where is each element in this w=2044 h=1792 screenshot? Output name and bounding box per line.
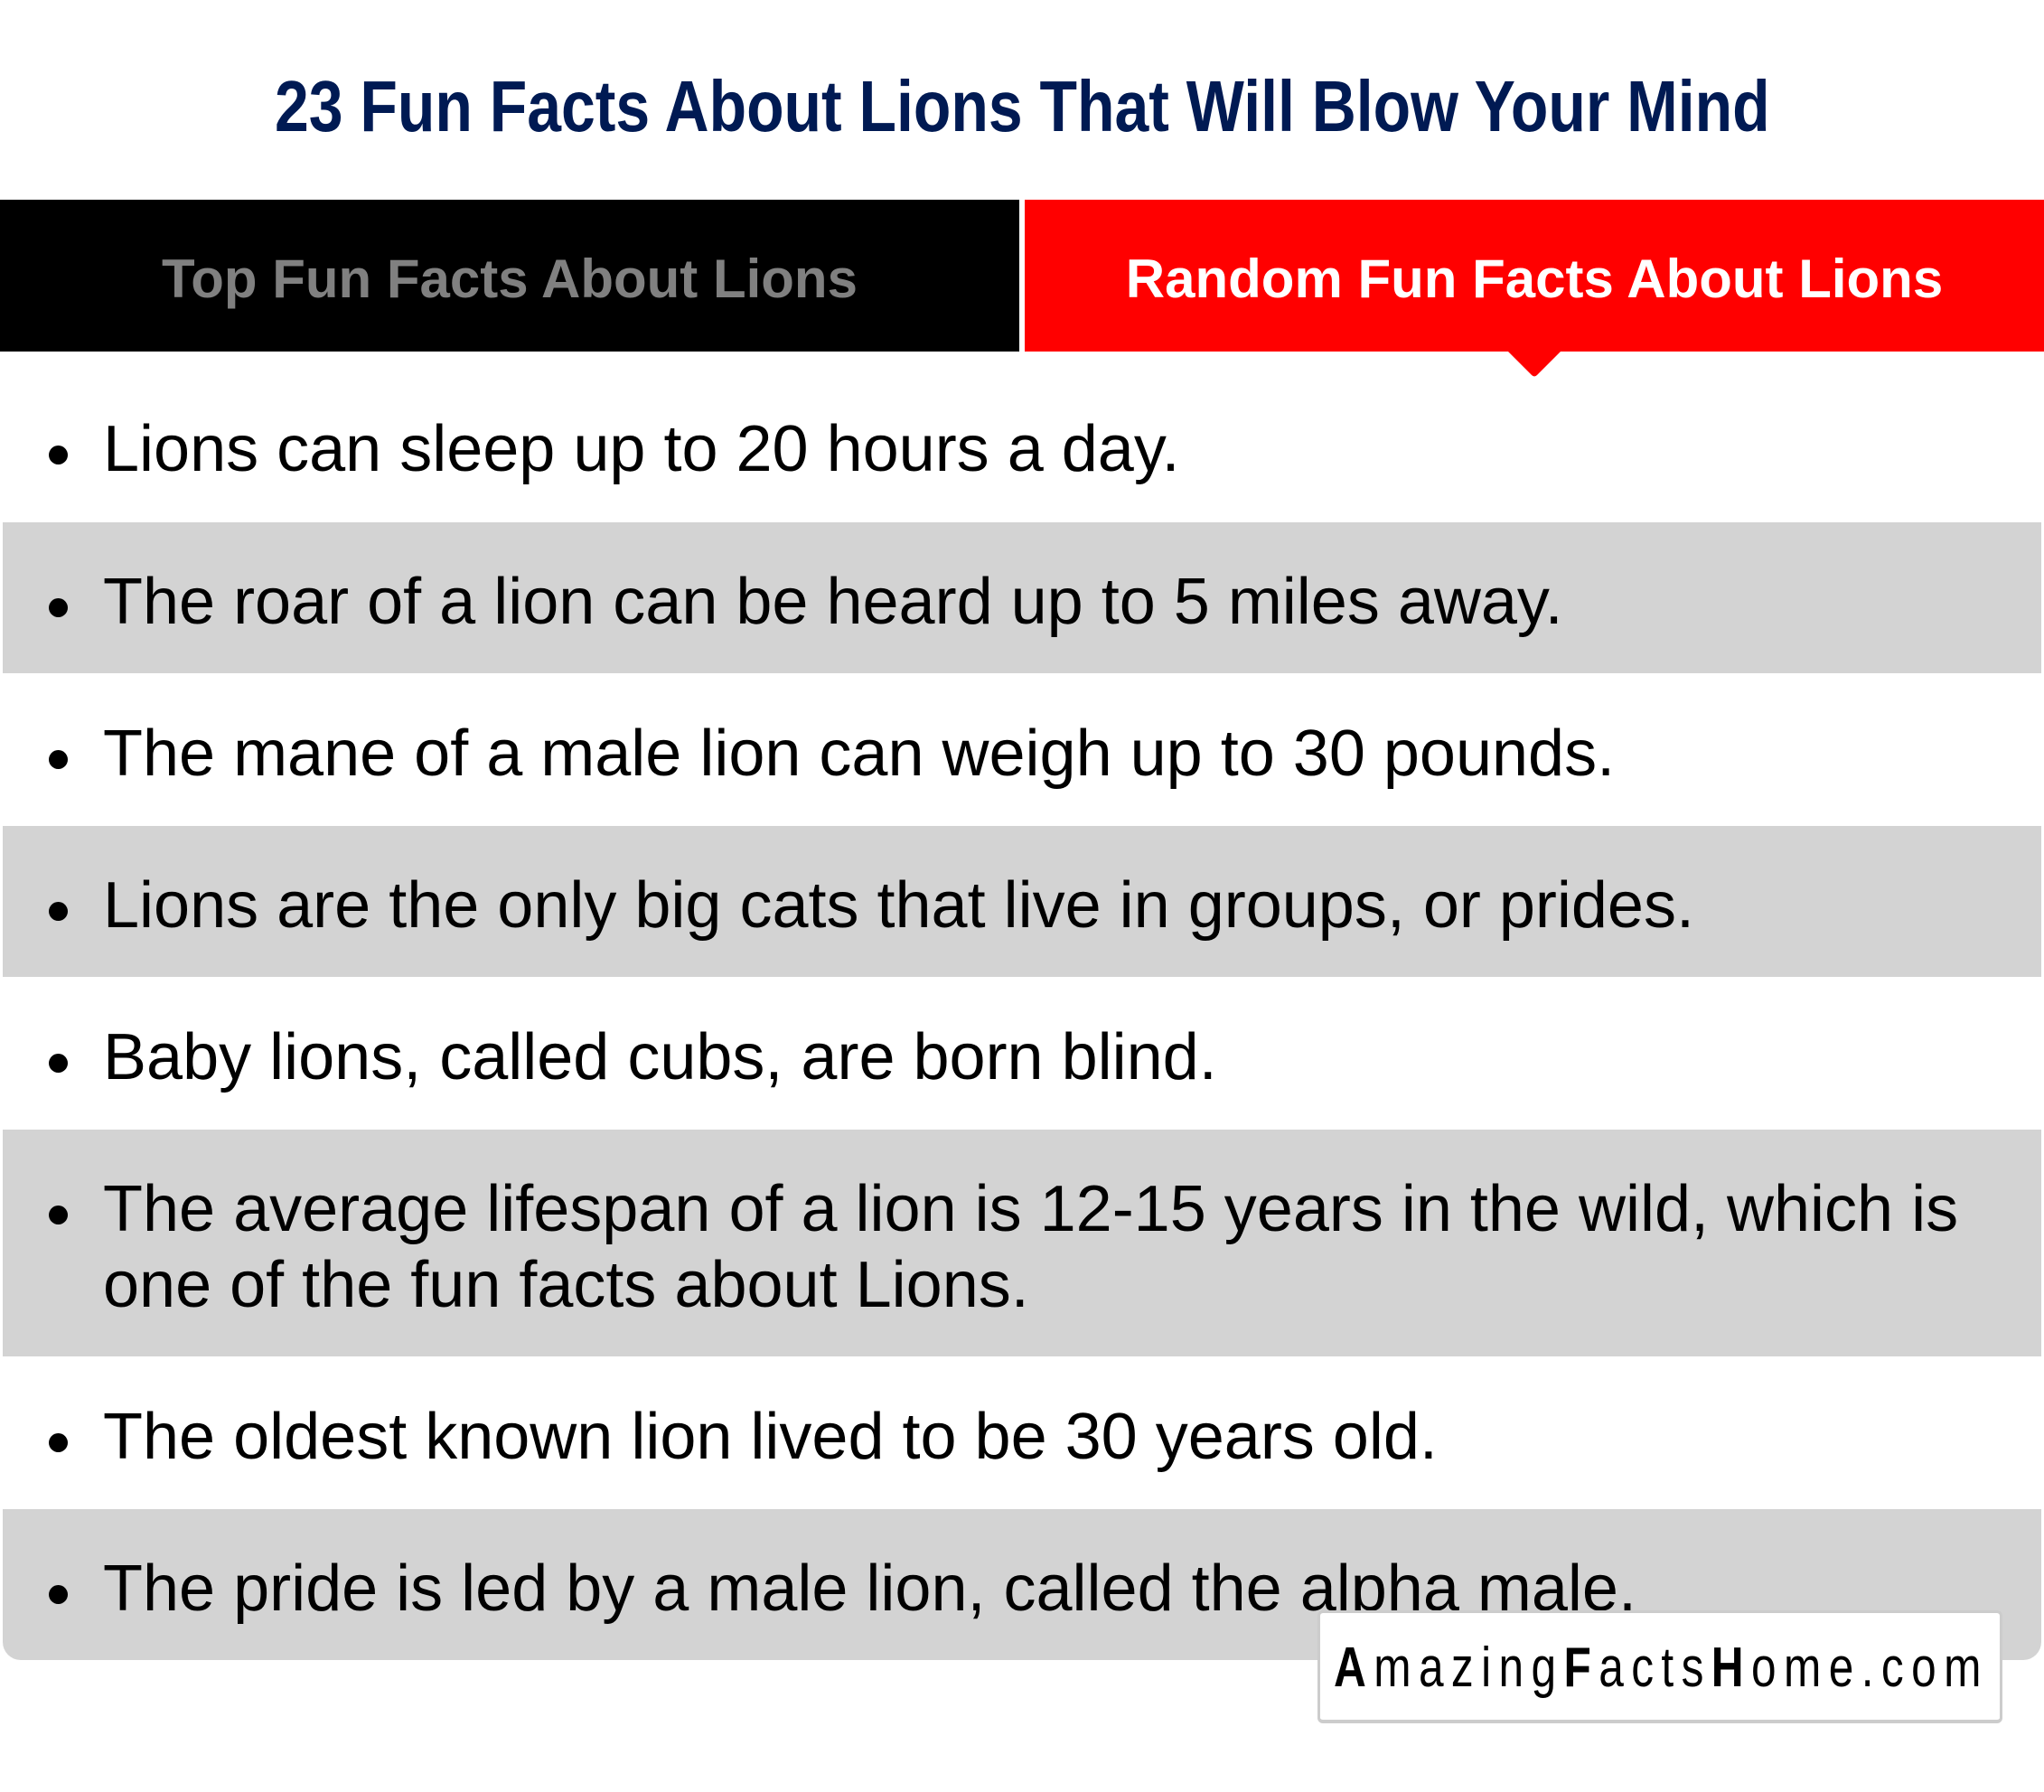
watermark xyxy=(1317,1610,2002,1723)
icon: active tab pointer xyxy=(1508,352,1561,376)
fact row 4 xyxy=(3,826,2041,977)
fact row 6 xyxy=(3,1130,2041,1356)
fact row 3: The mane of a male lion can weigh up to 30 pounds. xyxy=(103,718,1615,790)
fact row 8: The pride is led by a male lion, called the alpha male. xyxy=(103,1553,1636,1625)
fact row 5: Baby lions, called cubs, are born blind. xyxy=(103,1021,1217,1093)
fact row 6: The average lifespan of a lion is 12-15 years in the wild, which is xyxy=(103,1173,1958,1245)
fact row 2: The roar of a lion can be heard up to 5 miles away. xyxy=(103,566,1563,638)
tab: top fun facts: Top Fun Facts About Lions xyxy=(162,249,858,309)
fact row 6: one of the fun facts about Lions. xyxy=(103,1249,1029,1321)
fact row 8 xyxy=(3,1509,2041,1660)
fact row 7: The oldest known lion lived to be 30 years old. xyxy=(103,1401,1438,1473)
fact row 2 xyxy=(3,522,2041,673)
fact row 4: Lions are the only big cats that live in groups, or prides. xyxy=(103,869,1694,942)
tab: random fun facts: Random Fun Facts About Lions xyxy=(1126,249,1943,309)
title: 23 Fun Facts About Lions That Will Blow Your Mind xyxy=(275,66,1770,146)
tab: random fun facts xyxy=(1025,200,2044,352)
fact row 1: Lions can sleep up to 20 hours a day. xyxy=(103,413,1179,485)
watermark: AmazingFactsHome.com xyxy=(1334,1637,1989,1699)
tab: top fun facts xyxy=(0,200,1019,352)
